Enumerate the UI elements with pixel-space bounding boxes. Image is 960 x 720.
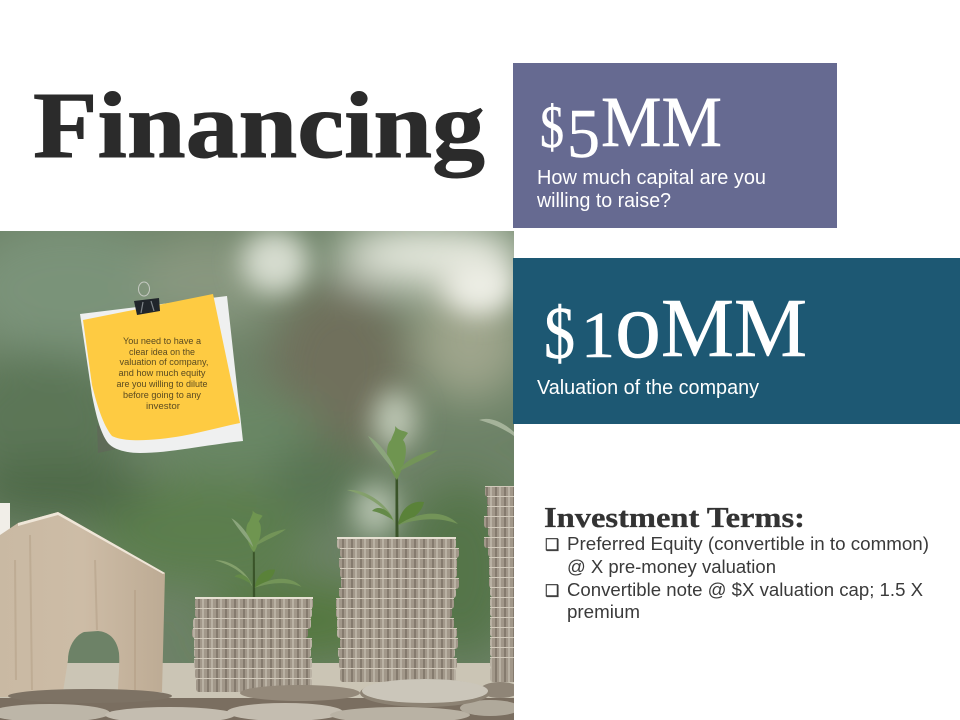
panel: $5MM capital <box>513 63 837 228</box>
table surface <box>0 663 514 698</box>
seedling small <box>215 510 302 597</box>
binder clip <box>134 282 160 315</box>
wooden house <box>0 512 165 697</box>
seedling far right <box>479 419 514 436</box>
sticky note <box>80 282 243 453</box>
term 2 <box>545 580 923 622</box>
loose coins on table <box>0 679 520 720</box>
note yellow sheet <box>83 294 240 440</box>
term 1 <box>545 534 929 577</box>
note text <box>116 336 208 411</box>
note text: clear idea on the <box>129 347 195 357</box>
figure: $5MM: 5 <box>567 96 600 173</box>
note text: investor <box>146 401 180 411</box>
note text: are you willing to dilute <box>116 379 208 389</box>
figure: $10MM: 1 <box>581 299 615 372</box>
photo: coins, seedlings and wooden house <box>0 220 530 720</box>
figure: $5MM <box>540 82 722 173</box>
blurred background foliage <box>0 220 525 660</box>
caption: capital: How much capital are you <box>537 167 766 189</box>
term 1: @ X pre-money valuation <box>567 557 776 577</box>
figure: $10MM: o <box>615 272 661 378</box>
caption: capital <box>536 167 766 212</box>
heading: Investment Terms: <box>544 503 805 534</box>
seedling large <box>347 426 458 537</box>
note text: valuation of company, <box>120 357 208 367</box>
caption: capital: willing to raise? <box>536 190 671 212</box>
caption: valuation: Valuation of the company <box>537 377 759 399</box>
term 2: ❑ <box>545 581 559 600</box>
coin stack 2 <box>336 537 459 682</box>
note white sheet <box>80 296 243 453</box>
figure: $5MM: $ <box>540 94 564 160</box>
coin stack 3 <box>484 486 514 682</box>
note text: before going to any <box>123 390 202 400</box>
figure: $5MM: MM <box>601 82 722 162</box>
figure: $10MM <box>544 272 807 378</box>
term 2: Convertible note @ $X valuation cap; 1.5 X <box>567 580 923 600</box>
figure: $10MM: MM <box>661 282 807 375</box>
term 1: ❑ <box>545 535 559 554</box>
panel: investment terms <box>544 503 929 622</box>
term 1: Preferred Equity (convertible in to common) <box>567 534 929 554</box>
note text: and how much equity <box>118 368 206 378</box>
note text: You need to have a <box>123 336 201 346</box>
left white block <box>0 503 10 535</box>
note shadow <box>97 425 135 453</box>
title: Financing <box>33 74 485 178</box>
term 2: premium <box>567 602 640 622</box>
figure: $10MM: $ <box>544 293 575 375</box>
coin stack 1 <box>192 597 313 692</box>
panel: $10MM valuation <box>513 258 960 424</box>
